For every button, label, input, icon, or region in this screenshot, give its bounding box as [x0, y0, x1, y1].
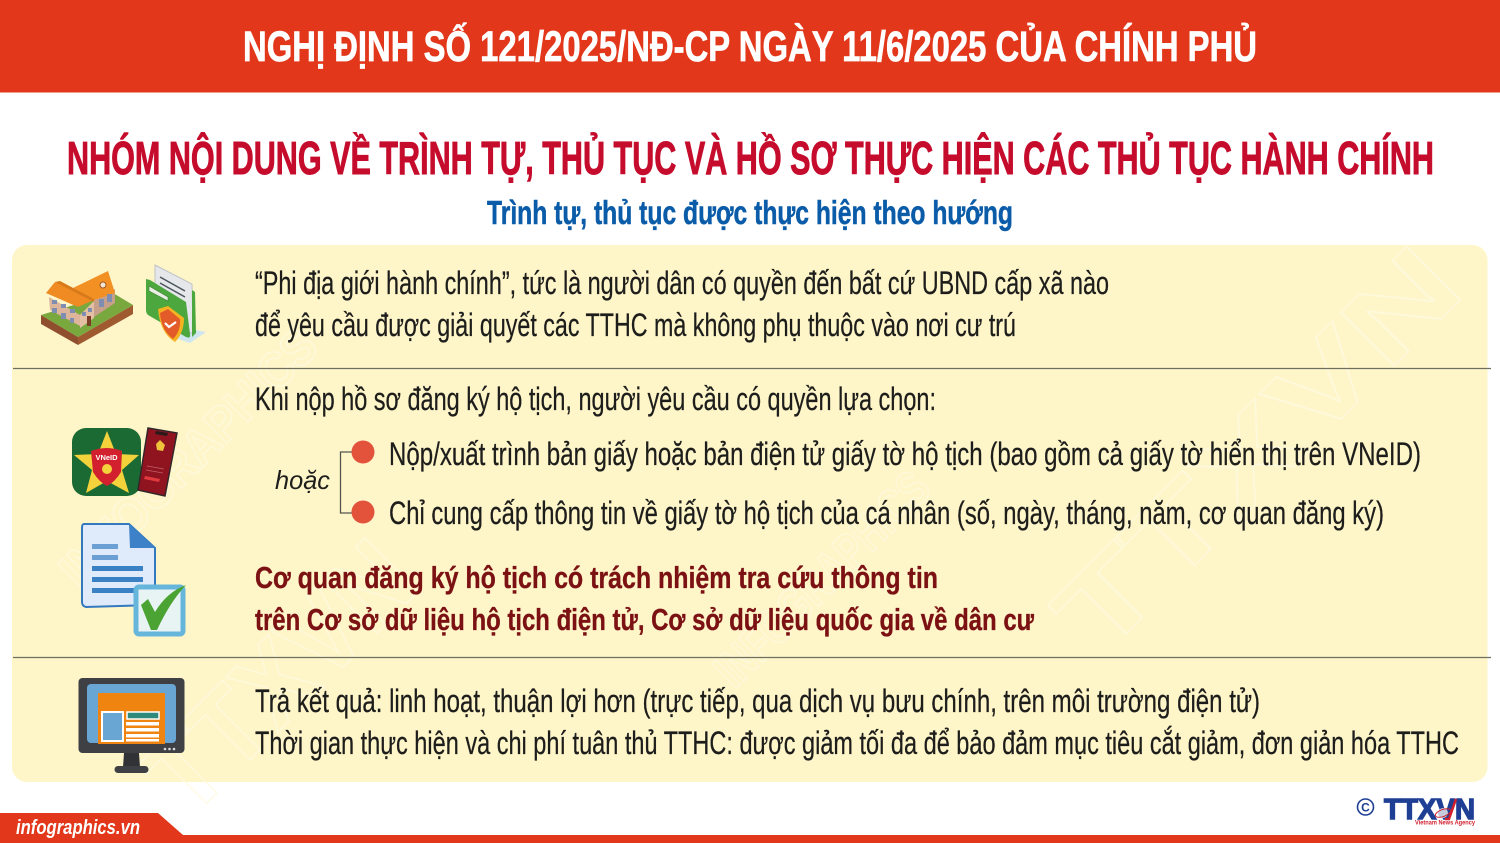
footer bar with website tab — [0, 813, 1500, 843]
panel: content background — [12, 245, 1488, 782]
icon: folder with shield — [146, 265, 206, 343]
text block: civil status intro: Khi nộp hồ sơ đăng ký hộ tịch, người yêu cầu có quyền lựa chọn: — [255, 381, 936, 417]
footer bar with website tab: infographics.vn — [16, 817, 140, 839]
text block: results and costs — [255, 683, 1459, 761]
logo: TTXVN: C — [1361, 800, 1370, 814]
text block: administrative boundaries: “Phi địa giới hành chính”, tức là người dân có quyền đến bất cứ UBND cấp xã nào — [255, 265, 1109, 301]
icon: document with check — [82, 524, 186, 634]
text block: agency responsibility — [255, 560, 1034, 637]
bracket with bullets — [340, 440, 374, 524]
icon: phone — [138, 428, 177, 496]
label: or: hoặc — [275, 465, 330, 495]
watermark — [48, 222, 1485, 837]
header band — [0, 0, 1500, 92]
logo: TTXVN: Vietnam News Agency — [1415, 820, 1476, 826]
icon: monitor — [78, 678, 184, 773]
text block: administrative boundaries — [255, 265, 1109, 343]
text block: agency responsibility: Cơ quan đăng ký hộ tịch có trách nhiệm tra cứu thông tin — [255, 560, 938, 595]
watermark: TTXVN — [1030, 222, 1485, 677]
divider lines — [13, 368, 1491, 658]
text block: agency responsibility: trên Cơ sở dữ liệu hộ tịch điện tử, Cơ sở dữ liệu quốc gia về dân cư — [255, 602, 1034, 637]
subheading: Trình tự, thủ tục được thực hiện theo hướng — [487, 194, 1013, 231]
icon: VNeID app: VNeID — [95, 453, 118, 462]
watermark: TTXVN — [120, 517, 440, 837]
icon: house on land — [41, 271, 133, 345]
logo: TTXVN: TTXVN — [1384, 794, 1475, 826]
text block: administrative boundaries: để yêu cầu được giải quyết các TTHC mà không phụ thuộc vào nơi cư trú — [255, 307, 1016, 343]
watermark: INFOGRAPHICS — [48, 318, 328, 598]
watermark: INFOGRAPHICS — [703, 460, 941, 698]
icon: VNeID app — [72, 428, 141, 496]
